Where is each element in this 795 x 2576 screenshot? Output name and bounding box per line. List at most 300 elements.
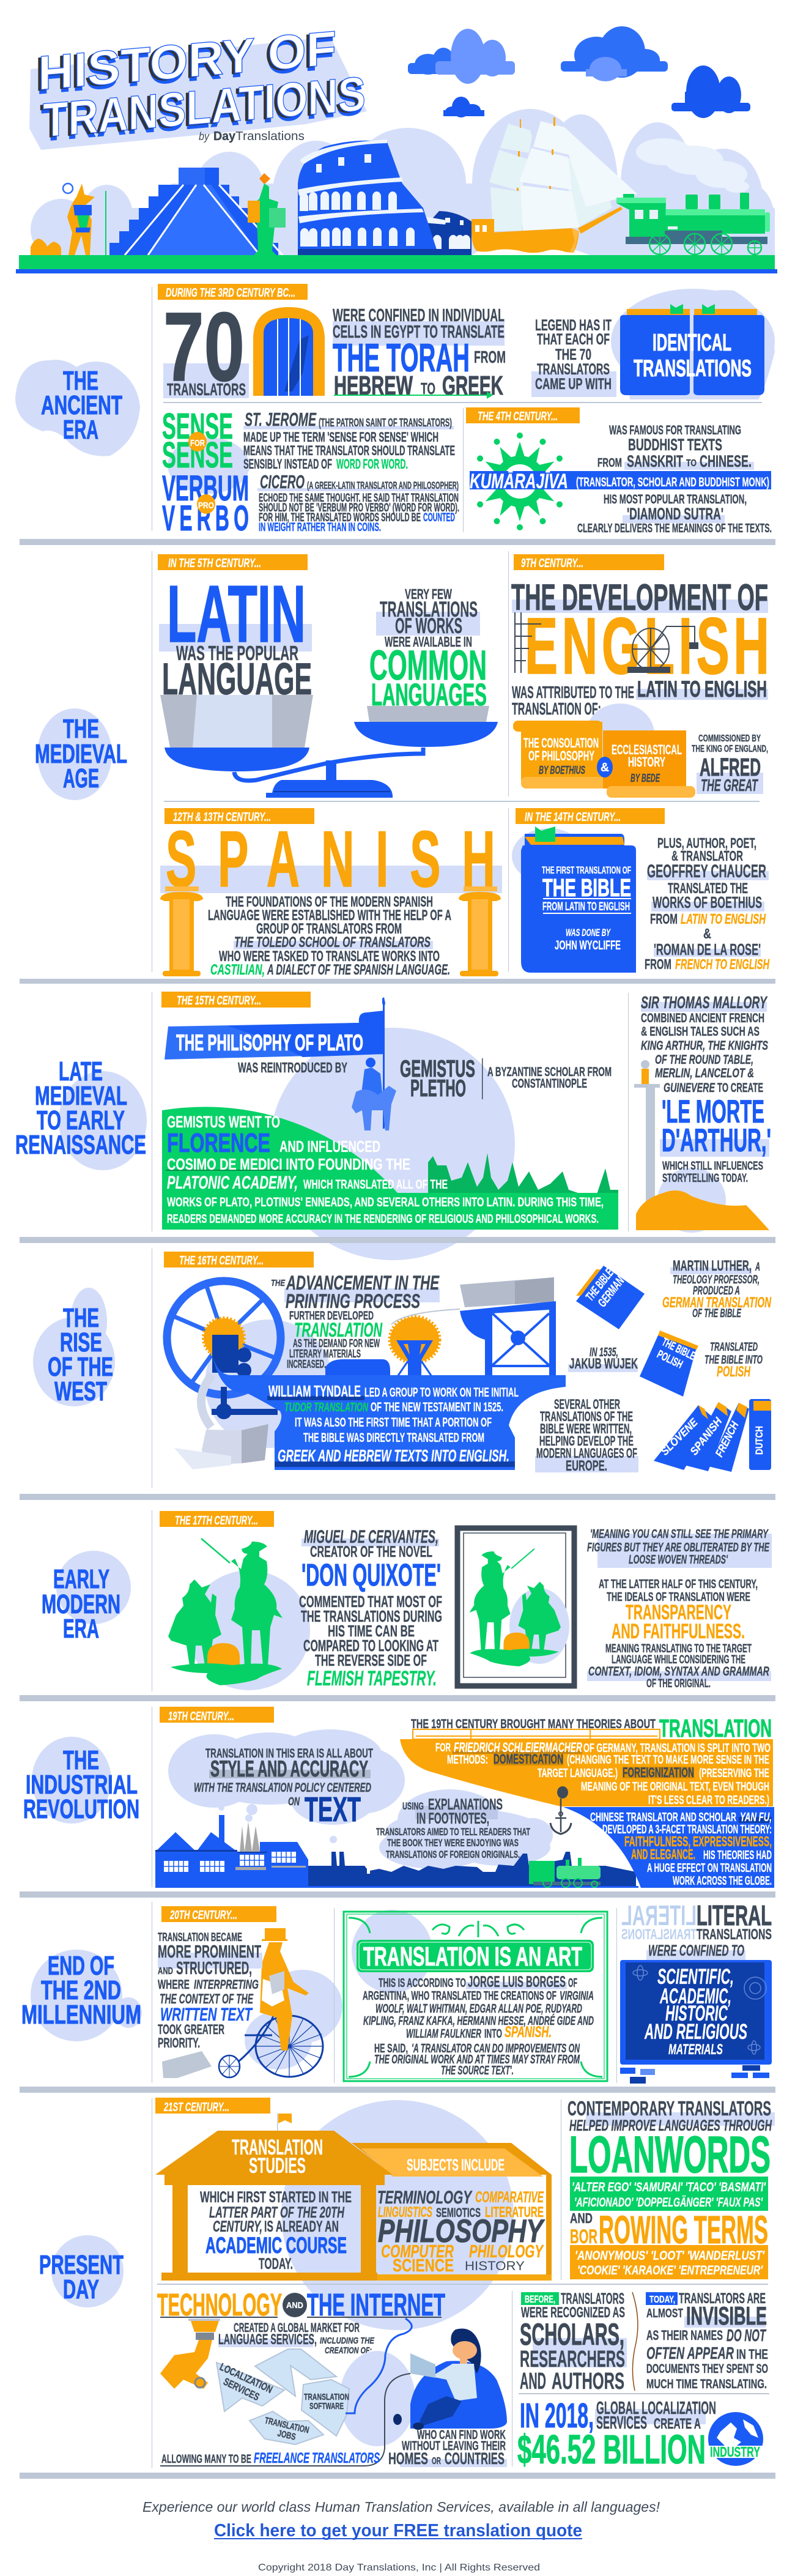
advancement in printing text: TRANSLATION <box>294 1319 383 1341</box>
scroll: ecclesiastical history: HISTORY <box>628 754 665 770</box>
Spanish text: THE TOLEDO SCHOOL OF TRANSLATORS <box>234 934 431 951</box>
icon: Wycliffe Bible book: JOHN WYCLIFFE <box>555 938 621 952</box>
smoke cloud: explanations in footnotes: TRANSLATORS AIMED TO TELL READERS THAT <box>376 1826 530 1838</box>
literal translations heading with mirror: TRANSLATIONS <box>621 1926 697 1943</box>
St Jerome text: ST. JEROME <box>245 409 317 430</box>
blue cable <box>346 2318 412 2413</box>
translation became text: TOOK GREATER <box>158 2022 224 2037</box>
tag: 5th century: IN THE 5TH CENTURY... <box>168 557 261 570</box>
icon: four translated Bibles <box>654 1399 771 1472</box>
era label: THE 2ND <box>41 1975 121 2005</box>
other translations text: EUROPE. <box>566 1458 607 1474</box>
before: translators as scholars: AND <box>520 2369 546 2394</box>
Chaucer text: FROM <box>650 911 678 927</box>
academic course text: WHICH FIRST STARTED IN THE <box>200 2189 352 2206</box>
ideals of translation text: OF THE ORIGINAL. <box>646 1677 711 1690</box>
era label: MILLENNIUM <box>21 2000 141 2030</box>
other translations text: SEVERAL OTHER <box>554 1397 620 1412</box>
scroll: consolation of philosophy: OF PHILOSOPHY <box>528 748 594 763</box>
byline: by <box>199 130 210 143</box>
William Tyndale text: GREEK AND HEBREW TEXTS INTO ENGLISH. <box>278 1446 509 1465</box>
advancement in printing text: LITERARY MATERIALS <box>289 1348 361 1360</box>
era label: REVOLUTION <box>23 1794 139 1824</box>
Borges text: KIPLING, FRANZ KAFKA, HERMANN HESSE, ANDRÉ GIDE AND <box>363 2014 594 2028</box>
homes or countries text: COUNTRIES <box>445 2449 505 2468</box>
Jakub Wujek text: TRANSLATED <box>710 1341 758 1354</box>
title: History of Translations <box>35 20 366 152</box>
translation became text: TRANSLATION BECAME <box>158 1931 242 1944</box>
William Tyndale text: IT WAS ALSO THE FIRST TIME THAT A PORTION OF <box>295 1416 492 1430</box>
translation became text: PRIORITY. <box>158 2035 200 2051</box>
Borges text <box>363 1973 594 2077</box>
panel: The Rise of the West <box>0 0 771 1488</box>
before: translators as scholars: WERE RECOGNIZED AS <box>521 2304 625 2321</box>
Cervantes text: COMMENTED THAT MOST OF <box>299 1592 442 1611</box>
icon: prison cell arch <box>253 307 325 396</box>
puzzle pieces: localization, software, jobs: TRANSLATION <box>304 2392 349 2402</box>
William Tyndale text <box>268 1382 519 1465</box>
title: History of Translations: HISTORY OF <box>36 24 335 105</box>
advancement in printing text: INCREASED. <box>287 1358 326 1370</box>
Borges text: VIRGINIA <box>560 1989 594 2003</box>
sense for sense wordmark: FOR <box>190 438 205 448</box>
academic course text: ACADEMIC COURSE <box>205 2233 347 2258</box>
Spanish text <box>208 894 451 978</box>
green banner title <box>357 1940 594 1972</box>
William Tyndale text: WILLIAM TYNDALE <box>268 1382 361 1400</box>
verbum pro verbo wordmark <box>162 469 249 538</box>
Florence text on hill: AND INFLUENCED <box>279 1137 380 1156</box>
sense for sense wordmark: SENSE <box>162 406 233 447</box>
era label: END OF <box>48 1951 114 1981</box>
icon: printing mechanism <box>515 612 698 673</box>
Borges text: HE SAID, <box>374 2042 408 2055</box>
panel: Schleiermacher orange shape: FOR <box>435 1742 451 1754</box>
2018 market size stat <box>517 2396 760 2473</box>
era label: THE <box>63 1745 99 1775</box>
tag: 15th century: THE 15TH CENTURY... <box>177 994 261 1008</box>
era label: WEST <box>54 1376 107 1406</box>
St Jerome text <box>243 409 455 472</box>
illustration: university building: STUDIES <box>249 2154 306 2178</box>
Cervantes text: HIS TIME CAN BE <box>328 1622 415 1640</box>
green banner title: TRANSLATION IS AN ART <box>363 1942 582 1972</box>
70 translators: TRANSLATORS <box>167 380 246 399</box>
Meaning quote text <box>587 1527 772 1568</box>
Spanish text: LANGUAGE WERE ESTABLISHED WITH THE HELP OF A <box>208 907 451 924</box>
era label <box>15 1056 147 1170</box>
other translations text <box>535 1397 638 1474</box>
icon: four translated Bibles: SLOVENE <box>659 1416 700 1458</box>
Borges text: INTO <box>484 2027 502 2041</box>
Florence text on hill: FLORENCE <box>167 1128 270 1158</box>
Martin Luther text: PRODUCED A <box>693 1285 740 1297</box>
icon: Polish Bible book: POLISH <box>655 1348 685 1372</box>
Alfred the Great <box>692 733 768 795</box>
chalkboard: scientific materials: ACADEMIC, <box>659 1984 731 2008</box>
tag: 19th century: 19TH CENTURY... <box>168 1710 234 1723</box>
scroll: ecclesiastical history: ECCLESIASTICAL <box>612 742 682 757</box>
confined in cells text: THE TORAH <box>333 335 470 380</box>
smoke cloud: style and accuracy: STYLE AND ACCURACY <box>210 1756 368 1781</box>
tag: 3rd century BC: DURING THE 3RD CENTURY BC... <box>166 286 295 300</box>
smoke cloud: style and accuracy: TEXT <box>305 1790 361 1829</box>
homes or countries text: HOMES <box>388 2449 428 2468</box>
Borges text: JORGE LUIS BORGES <box>468 1973 566 1991</box>
Jakub Wujek text: JAKUB WUJEK <box>569 1356 638 1372</box>
technology and the internet heading: THE INTERNET <box>307 2287 445 2322</box>
Cervantes text: FLEMISH TAPESTRY. <box>307 1667 437 1690</box>
common languages text: OF WORKS <box>395 614 462 638</box>
70 translators: 70 <box>163 292 245 401</box>
created a global market text: CREATED A GLOBAL MARKET FOR <box>234 2321 360 2335</box>
smoke cloud: explanations in footnotes: USING <box>402 1800 424 1812</box>
Kumarajiva text: SANSKRIT <box>627 452 683 470</box>
era label <box>33 1288 115 1406</box>
era label: AGE <box>63 763 99 793</box>
borrowing terms block <box>570 2208 768 2279</box>
other translations text: TRANSLATIONS OF THE <box>540 1409 633 1424</box>
icon: Egyptian figure and pots <box>31 184 106 255</box>
icon: German Bible book <box>576 1266 645 1329</box>
Martin Luther text: A <box>755 1261 760 1274</box>
icon: sword in the stone <box>634 1060 769 1233</box>
ampersand badge <box>597 757 613 778</box>
confined in cells text: CELLS IN EGYPT TO TRANSLATE <box>333 322 505 342</box>
academic course text: IS ALREADY AN <box>264 2218 339 2235</box>
advancement in printing text: ADVANCEMENT IN THE <box>286 1272 440 1294</box>
era label: RISE <box>60 1327 102 1357</box>
loanwords block <box>568 2097 775 2211</box>
panel: Schleiermacher orange shape: DOMESTICATION <box>494 1751 563 1767</box>
Gemistus Pletho text <box>238 1056 612 1102</box>
academic course text <box>200 2189 352 2273</box>
icon: sailing ship <box>471 117 637 255</box>
Cicero text: (A GREEK-LATIN TRANSLATOR AND PHILOSOPHER) <box>307 480 459 491</box>
era label: RENAISSANCE <box>15 1130 146 1160</box>
2018 market size stat: CREATE A <box>654 2416 701 2432</box>
Thomas Mallory text: MERLIN, LANCELOT & <box>655 1066 754 1080</box>
sense for sense wordmark: SENSE <box>162 435 233 475</box>
panel: End of the 2nd Millennium <box>21 1899 772 2084</box>
title: History of Translations: TRANSLATIONS <box>41 70 364 152</box>
scroll: ecclesiastical history: BY BEDE <box>630 772 660 784</box>
common languages text: WERE AVAILABLE IN <box>385 634 472 650</box>
footer call to action: Experience our world class Human Translation Services, available in all languages! <box>142 2499 660 2515</box>
green hill and skyline <box>162 1107 618 1230</box>
Cervantes text <box>299 1527 442 1690</box>
before: translators as scholars: TRANSLATORS <box>561 2290 624 2307</box>
Kumarajiva text <box>577 423 772 535</box>
subjects word cloud: PHILOSOPHY <box>378 2213 545 2249</box>
heading: theories about translation <box>411 1714 772 1742</box>
translation became text: THE CONTEXT OF THE <box>160 1991 254 2006</box>
Cicero text: COUNTED <box>423 511 455 524</box>
flag banner: philosophy of Plato <box>165 1020 385 1060</box>
chalkboard: scientific materials: SCIENTIFIC, <box>657 1965 734 1989</box>
homes or countries text <box>388 2428 507 2468</box>
tag: 9th century: 9TH CENTURY... <box>521 557 583 570</box>
puzzle pieces: localization, software, jobs: SERVICES <box>221 2376 261 2403</box>
legend text <box>531 317 616 397</box>
Borges text: 'A TRANSLATOR CAN DO IMPROVEMENTS ON <box>412 2042 580 2055</box>
Latin heading <box>159 569 312 704</box>
Alfred the Great: COMMISSIONED BY <box>698 733 761 744</box>
icon: Wycliffe Bible book <box>512 826 636 973</box>
panel: Translation is an art frame <box>344 1910 607 2081</box>
flag banner: philosophy of Plato: THE PHILISOPHY OF PLATO <box>176 1030 363 1055</box>
illustration: man on penny-farthing bicycle <box>162 1928 342 2078</box>
William Tyndale text: OF THE NEW TESTAMENT IN 1525. <box>371 1400 503 1414</box>
Cervantes text: THE TRANSLATIONS DURING <box>301 1607 442 1625</box>
scroll: consolation of philosophy: BY BOETHIUS <box>539 764 585 776</box>
Cervantes text: COMPARED TO LOOKING AT <box>303 1636 438 1655</box>
panel: Schleiermacher orange shape: TARGET LANGUAGE.) <box>538 1767 618 1780</box>
era label <box>35 708 127 800</box>
borrowing terms block: AND <box>570 2210 593 2226</box>
Gemistus Pletho text: GEMISTUS <box>400 1056 475 1082</box>
Spanish text: GROUP OF TRANSLATORS FROM <box>256 921 402 937</box>
Kumarajiva text: TO <box>686 458 697 469</box>
legend text: LEGEND HAS IT <box>535 317 612 334</box>
Latin heading: WAS THE POPULAR <box>176 642 298 664</box>
homes or countries text: WITHOUT LEAVING THEIR <box>402 2439 506 2453</box>
academic course text: CENTURY, <box>213 2218 262 2235</box>
Latin heading: LATIN <box>167 569 306 659</box>
confined in cells text: HEBREW <box>334 371 413 401</box>
Jakub Wujek text: POLISH <box>717 1364 750 1380</box>
Kumarajiva banner <box>470 470 771 493</box>
era label: INDUSTRIAL <box>26 1770 138 1800</box>
era label <box>42 1551 131 1644</box>
smoke cloud: explanations in footnotes: IN FOOTNOTES, <box>416 1810 489 1827</box>
header: illustrated city scene and title <box>16 20 777 273</box>
smoke cloud: style and accuracy: ON <box>288 1795 300 1808</box>
era label: ERA <box>63 1614 99 1644</box>
advancement in printing text <box>271 1272 440 1370</box>
icon: German Bible book: THE BIBLE <box>583 1266 616 1304</box>
Gemistus Pletho text: WAS REINTRODUCED BY <box>238 1060 347 1075</box>
verbum pro verbo wordmark: VERBO <box>162 499 249 538</box>
Spanish text: CASTILIAN, <box>210 962 265 978</box>
ideals of translation text: TRANSPARENCY <box>626 1601 731 1624</box>
translation became text: INTERPRETING <box>194 1978 259 1992</box>
illustration: Don Quixote and Sancho silhouette <box>168 1539 310 1690</box>
panel: The Ancient Era <box>15 284 775 538</box>
era label: DAY <box>63 2274 99 2304</box>
Cicero text: ECHOED THE SAME THOUGHT. HE SAID THAT TRANSLATION <box>259 492 459 505</box>
byline: Day <box>213 130 236 143</box>
Spanish text: A DIALECT OF THE SPANISH LANGUAGE. <box>267 962 450 978</box>
translation became text: WHERE <box>158 1978 190 1992</box>
panel: Schleiermacher orange shape: METHODS: <box>447 1753 488 1767</box>
tag: 20th century: 20TH CENTURY... <box>169 1909 237 1922</box>
scroll: consolation of philosophy <box>513 703 654 789</box>
subjects word cloud: LINGUISTICS <box>378 2204 432 2221</box>
confined in cells text: WERE CONFINED IN INDIVIDUAL <box>333 306 505 325</box>
era label: EARLY <box>53 1564 109 1594</box>
era label: OF THE <box>48 1352 113 1382</box>
Cervantes text: MIGUEL DE CERVANTES, <box>304 1527 438 1547</box>
tag: 16th century: THE 16TH CENTURY... <box>179 1254 264 1268</box>
Cervantes text: 'DON QUIXOTE' <box>301 1557 441 1592</box>
created a global market text: CREATION OF: <box>325 2345 372 2356</box>
ground <box>16 255 777 273</box>
common languages text: TRANSLATIONS <box>380 598 478 622</box>
Borges text: THE SOURCE TEXT'. <box>441 2064 514 2077</box>
icon: four translated Bibles: DUTCH <box>753 1426 765 1455</box>
Borges text: WOOLF, WALT WHITMAN, EDGAR ALLAN POE, RUDYARD <box>375 2002 582 2016</box>
ampersand badge: & <box>601 761 609 774</box>
confined in cells text: FROM <box>474 347 506 366</box>
Cervantes text: CREATOR OF THE NOVEL <box>310 1543 432 1561</box>
translation became text: STRUCTURED, <box>176 1959 252 1978</box>
borrowing terms block: BOR <box>570 2225 597 2248</box>
2018 market size stat: IN 2018, <box>520 2396 594 2435</box>
era label: ANCIENT <box>41 390 122 420</box>
Jakub Wujek text <box>568 1341 763 1380</box>
2018 market size stat: SERVICES <box>596 2413 647 2433</box>
Kumarajiva text: FROM <box>597 456 622 470</box>
illustration: university building <box>155 2114 552 2281</box>
Borges text: OF <box>568 1977 577 1990</box>
advancement in printing text: PRINTING PROCESS <box>286 1290 420 1312</box>
era label <box>15 360 140 456</box>
common languages text: COMMON <box>369 642 487 689</box>
panel: Schleiermacher orange shape <box>400 1739 773 1807</box>
William Tyndale text: LED A GROUP TO WORK ON THE INITIAL <box>364 1386 519 1400</box>
Spanish text: THE FOUNDATIONS OF THE MODERN SPANISH <box>226 894 433 910</box>
panel: Yan Fu blue shape <box>563 1807 774 1888</box>
before: translators as scholars: RESEARCHERS <box>520 2347 625 2372</box>
smoke cloud: explanations in footnotes <box>330 1789 553 1869</box>
William Tyndale text: THE BIBLE WAS DIRECTLY TRANSLATED FROM <box>303 1431 484 1445</box>
footer call to action <box>142 2499 660 2541</box>
era label: THE <box>63 714 99 744</box>
legend text: THAT EACH OF <box>537 331 610 348</box>
confined in cells text: GREEK <box>442 371 503 401</box>
confined in cells text: TO <box>421 379 435 398</box>
chalkboard: scientific materials <box>620 1960 772 2065</box>
legend text: TRANSLATORS <box>537 361 610 378</box>
chalkboard: scientific materials: MATERIALS <box>668 2041 723 2058</box>
translation became text: AND <box>158 1966 173 1977</box>
Thomas Mallory text: TO CREATE <box>717 1081 763 1095</box>
Jakub Wujek text: THE BIBLE INTO <box>704 1354 763 1367</box>
icon: small locomotive <box>529 1858 601 1887</box>
Cicero text: IN WEIGHT RATHER THAN IN COINS. <box>259 521 381 534</box>
ornament <box>349 1918 602 2077</box>
smoke cloud: style and accuracy <box>168 1729 405 1829</box>
before: translators as scholars: AUTHORS <box>552 2369 624 2394</box>
tag: 21st century: 21ST CENTURY... <box>163 2101 229 2114</box>
today: translators invisible: ALMOST <box>646 2307 683 2320</box>
icon: stepped pyramid <box>109 168 286 255</box>
Jakub Wujek text: IN 1535, <box>590 1346 618 1359</box>
today: translators invisible <box>646 2290 768 2391</box>
homes or countries text: WHO CAN FIND WORK <box>417 2428 506 2442</box>
era label <box>23 1737 139 1824</box>
Chaucer text: FROM <box>645 956 671 972</box>
homes or countries text: OR <box>432 2456 441 2467</box>
smoke cloud: style and accuracy: TRANSLATION IN THIS ERA IS ALL ABOUT <box>205 1746 373 1761</box>
puzzle pieces: localization, software, jobs: LOCALIZATION <box>218 2361 275 2396</box>
panel: Schleiermacher orange shape: FOREIGNIZATION <box>623 1765 694 1780</box>
subjects word cloud: COMPUTER <box>381 2242 454 2262</box>
illustration: factories and skyline <box>155 1815 638 1888</box>
panel: Late Medieval to Early Renaissance <box>15 992 771 1260</box>
icon: colosseum <box>298 139 471 255</box>
tag: 4th century <box>466 407 580 423</box>
before: translators as scholars: BEFORE, <box>525 2293 555 2305</box>
academic course text: LATTER PART OF THE 20TH <box>209 2204 345 2221</box>
academic course text: TODAY. <box>259 2255 293 2273</box>
title: History of Translations: HISTORY OF <box>35 21 333 102</box>
subjects word cloud: COMPARATIVE <box>475 2189 544 2206</box>
translation became text: WRITTEN TEXT <box>160 2005 253 2025</box>
Cicero text <box>257 471 459 534</box>
today: translators invisible: AS THEIR NAMES <box>646 2328 723 2343</box>
Gemistus Pletho text: A BYZANTINE SCHOLAR FROM <box>487 1065 612 1079</box>
era label: MODERN <box>42 1589 120 1619</box>
framed tapestry <box>457 1528 574 1686</box>
icon: steam locomotive <box>616 193 770 254</box>
2018 market size stat: INDUSTRY <box>710 2444 760 2460</box>
tag: 9th century <box>514 554 664 570</box>
era label: ERA <box>63 415 98 445</box>
Cicero text: FOR HIM, THE TRANSLATED WORDS SHOULD BE <box>259 511 421 524</box>
today: translators invisible: OFTEN APPEAR <box>646 2344 734 2363</box>
steam plume <box>636 138 749 193</box>
Chaucer text <box>645 835 769 972</box>
common languages text <box>369 586 487 712</box>
icon: Wycliffe Bible book: THE BIBLE <box>542 874 631 902</box>
today: translators invisible: TODAY, <box>649 2295 675 2305</box>
Thomas Mallory text: GUINEVERE <box>664 1081 716 1095</box>
Florence text on hill <box>166 1113 604 1226</box>
Cervantes text: THE REVERSE SIDE OF <box>315 1651 427 1669</box>
Borges text: ARGENTINA, WHO TRANSLATED THE CREATIONS OF <box>363 1989 556 2003</box>
icon: German Bible book: GERMAN <box>596 1274 627 1310</box>
Borges text: THIS IS ACCORDING TO <box>379 1977 466 1990</box>
St Jerome text: MADE UP THE TERM 'SENSE FOR SENSE' WHICH <box>243 429 438 445</box>
Borges text: SPANISH. <box>505 2024 552 2041</box>
tag: 12th and 13th century: 12TH & 13TH CENTURY... <box>173 811 271 824</box>
St Jerome text: WORD FOR WORD. <box>336 456 408 472</box>
other translations text: HELPING DEVELOP THE <box>539 1433 634 1449</box>
curved divider <box>632 2292 638 2391</box>
Florence text on hill: PLATONIC ACADEMY, <box>167 1173 298 1193</box>
scroll: consolation of philosophy: THE CONSOLATION <box>523 735 599 751</box>
subjects word cloud: LITERATURE <box>485 2204 544 2221</box>
panel: Yan Fu blue shape: YAN FU, <box>740 1811 772 1824</box>
icon: Polish Bible book: THE BIBLE <box>660 1336 697 1363</box>
title banner <box>29 37 367 150</box>
icon: open book identical translations: IDENTICAL <box>653 330 731 356</box>
era label: TO EARLY <box>37 1105 125 1135</box>
dark cable and freelance text: FREELANCE TRANSLATORS <box>254 2450 380 2467</box>
ideals of translation text <box>587 1578 771 1690</box>
dark cable and freelance text <box>160 2374 410 2467</box>
icon: Wycliffe Bible book: WAS DONE BY <box>566 927 611 938</box>
Meaning quote text: LOOSE WOVEN THREADS' <box>629 1553 728 1567</box>
clouds <box>408 26 750 118</box>
translation became text: MORE PROMINENT <box>158 1942 261 1962</box>
era label: THE <box>63 366 98 396</box>
subjects word cloud: SCIENCE <box>393 2256 454 2276</box>
development of English heading: ENGLISH <box>525 601 769 691</box>
illustration: university building: SUBJECTS INCLUDE <box>407 2156 505 2174</box>
